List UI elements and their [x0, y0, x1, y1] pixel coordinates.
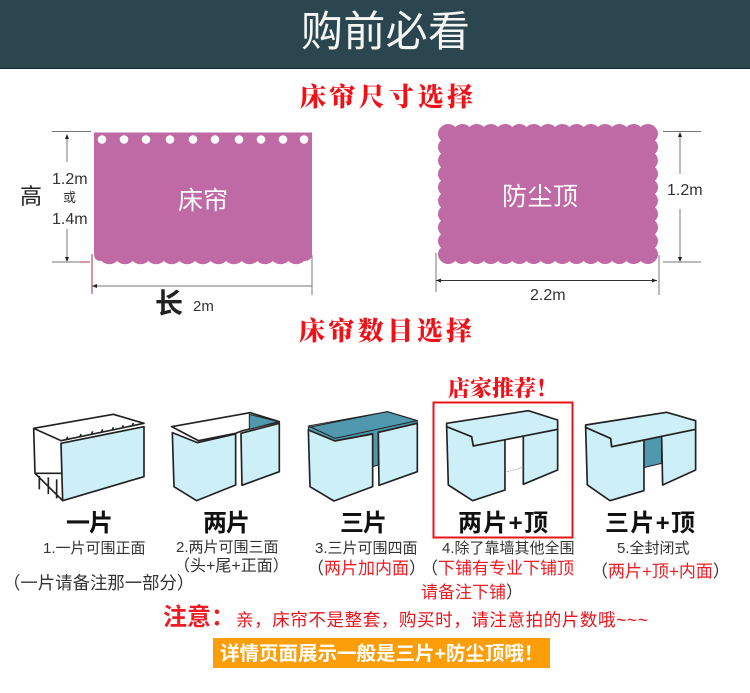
length dimension	[92, 255, 312, 319]
illustration: two pieces plus top	[447, 411, 558, 501]
illustration: three pieces plus top	[586, 412, 696, 501]
height dimension	[20, 132, 92, 294]
red highlight box	[434, 402, 572, 538]
option: three pieces: 三片	[340, 510, 387, 537]
orange callout: 详情页面展示一般是三片+防尘顶哦！	[220, 642, 543, 665]
option: three pieces plus top: （两片+顶+内面）	[591, 562, 730, 581]
option: two pieces plus top, recommended: 两片+顶	[458, 510, 548, 537]
curtain panel: 床帘	[178, 187, 228, 215]
recommended label: 店家推荐！	[448, 372, 558, 403]
illustration: one piece	[34, 414, 144, 501]
heading: curtain size selection: 床帘尺寸选择	[300, 77, 473, 114]
notice line: 注意：	[163, 603, 235, 631]
option: three pieces plus top: 5.全封闭式	[617, 539, 690, 557]
header banner: 购前必看	[301, 8, 470, 55]
option: one piece: 1.一片可围正面	[43, 540, 146, 557]
option: one piece	[3, 414, 194, 593]
header banner	[0, 0, 750, 69]
height dimension: 1.2m	[52, 171, 88, 188]
dust-proof top panel	[438, 124, 658, 264]
option: two pieces plus top, recommended: 4.除了靠墙其他全围	[442, 539, 575, 557]
option: one piece: （一片请备注那一部分）	[3, 573, 194, 593]
option: three pieces: （两片加内面）	[307, 559, 426, 578]
illustration: two pieces	[172, 413, 279, 501]
height dimension: 1.4m	[52, 211, 88, 228]
length dimension: 2m	[193, 298, 214, 315]
option: two pieces plus top, recommended: 请备注下铺）	[421, 583, 523, 602]
depth dimension: 1.2m	[667, 182, 703, 199]
diagram: bed curtain size	[20, 132, 312, 319]
option: three pieces plus top	[586, 412, 730, 581]
option: three pieces	[307, 412, 426, 578]
option: two pieces plus top, recommended: （下铺有专业下铺顶	[421, 559, 574, 578]
option: two pieces	[172, 413, 289, 575]
option: two pieces plus top, recommended	[421, 372, 575, 602]
option: three pieces: 3.三片可围四面	[315, 540, 418, 557]
option: two pieces: 两片	[203, 510, 250, 537]
curtain panel	[94, 132, 312, 264]
dust-proof top panel: 防尘顶	[502, 183, 578, 211]
width dimension	[436, 253, 659, 304]
illustration: three pieces	[308, 412, 417, 501]
height dimension: 或	[63, 190, 76, 205]
notice line	[163, 603, 648, 631]
height dimension: 高	[20, 184, 42, 209]
option: one piece: 一片	[66, 510, 113, 537]
notice line: 亲，床帘不是整套，购买时，请注意拍的片数哦~~~	[236, 610, 648, 630]
option: three pieces plus top: 三片+顶	[605, 510, 695, 537]
option: two pieces: 2.两片可围三面	[176, 539, 279, 556]
depth dimension	[663, 132, 703, 262]
heading: curtain quantity selection: 床帘数目选择	[299, 311, 472, 348]
option: two pieces: （头+尾+正面）	[174, 557, 289, 575]
length dimension: 长	[155, 288, 183, 319]
diagram: dust-proof top size	[436, 124, 703, 304]
width dimension: 2.2m	[530, 287, 566, 304]
